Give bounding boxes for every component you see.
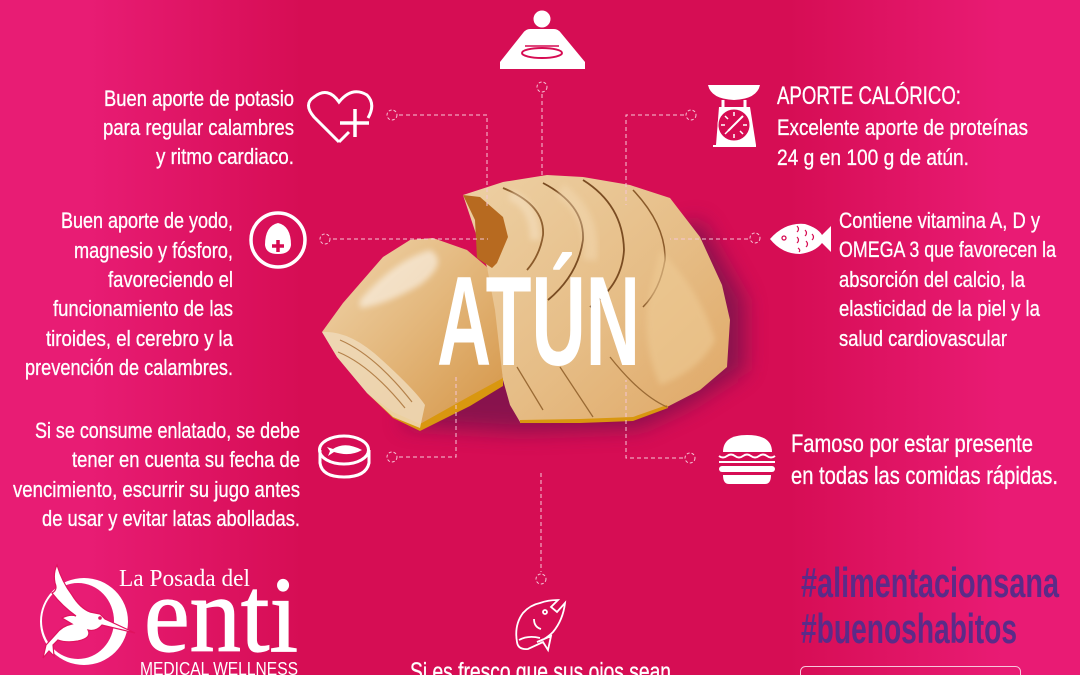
text: potassium: para regular calambres (103, 115, 294, 140)
text: iodine: tiroides, el cerebro y la (46, 326, 233, 351)
icon: kitchen scale (708, 85, 760, 147)
text: calories: APORTE CALÓRICO: (777, 81, 961, 110)
text: iodine: prevención de calambres. (25, 355, 233, 380)
text: vitamins: absorción del calcio, la (839, 267, 1025, 292)
tuna photo (322, 175, 745, 432)
icon: burger (719, 435, 775, 484)
text: canned: tener en cuenta su fecha de (72, 447, 300, 472)
icon: heart plus (308, 92, 372, 142)
icon: fish (770, 224, 831, 254)
text: vitamins: Contiene vitamina A, D y (839, 208, 1041, 233)
button outline (800, 666, 1020, 675)
logo ring (40, 578, 128, 665)
text: iodine: funcionamiento de las (53, 296, 233, 321)
icon: fresh fish outline (516, 600, 565, 650)
text: canned: vencimiento, escurrir su jugo antes (13, 477, 300, 502)
text: canned (13, 418, 300, 531)
text: iodine: Buen aporte de yodo, (61, 208, 233, 233)
hummingbird (43, 565, 135, 658)
text: vitamins: elasticidad de la piel y la (839, 296, 1040, 321)
text: iodine: favoreciendo el (108, 267, 233, 292)
text: iodine (25, 208, 233, 380)
text: iodine: magnesio y fósforo, (74, 238, 233, 263)
icon: tin can (320, 436, 369, 477)
connector lines (320, 82, 760, 584)
text: fast food (791, 430, 1058, 490)
text: canned: de usar y evitar latas abolladas. (42, 506, 300, 531)
logo wordmark: enti (144, 556, 298, 675)
icon: person at table (500, 10, 585, 69)
text: potassium: y ritmo cardiaco. (156, 144, 294, 169)
icon: egg in circle (251, 213, 305, 267)
text: calories: Excelente aporte de proteínas (777, 115, 1028, 140)
text: potassium (103, 86, 294, 169)
text: vitamins: salud cardiovascular (839, 326, 1007, 351)
text: calories (777, 81, 1028, 170)
logo (40, 556, 298, 675)
text: canned: Si se consume enlatado, se debe (35, 418, 300, 443)
text: vitamins (839, 208, 1056, 351)
text: potassium: Buen aporte de potasio (104, 86, 294, 111)
logo wordmark: La Posada del (119, 566, 250, 592)
title: ATÚN (437, 250, 640, 392)
text: calories: 24 g en 100 g de atún. (777, 145, 969, 170)
hashtags (801, 559, 1059, 652)
